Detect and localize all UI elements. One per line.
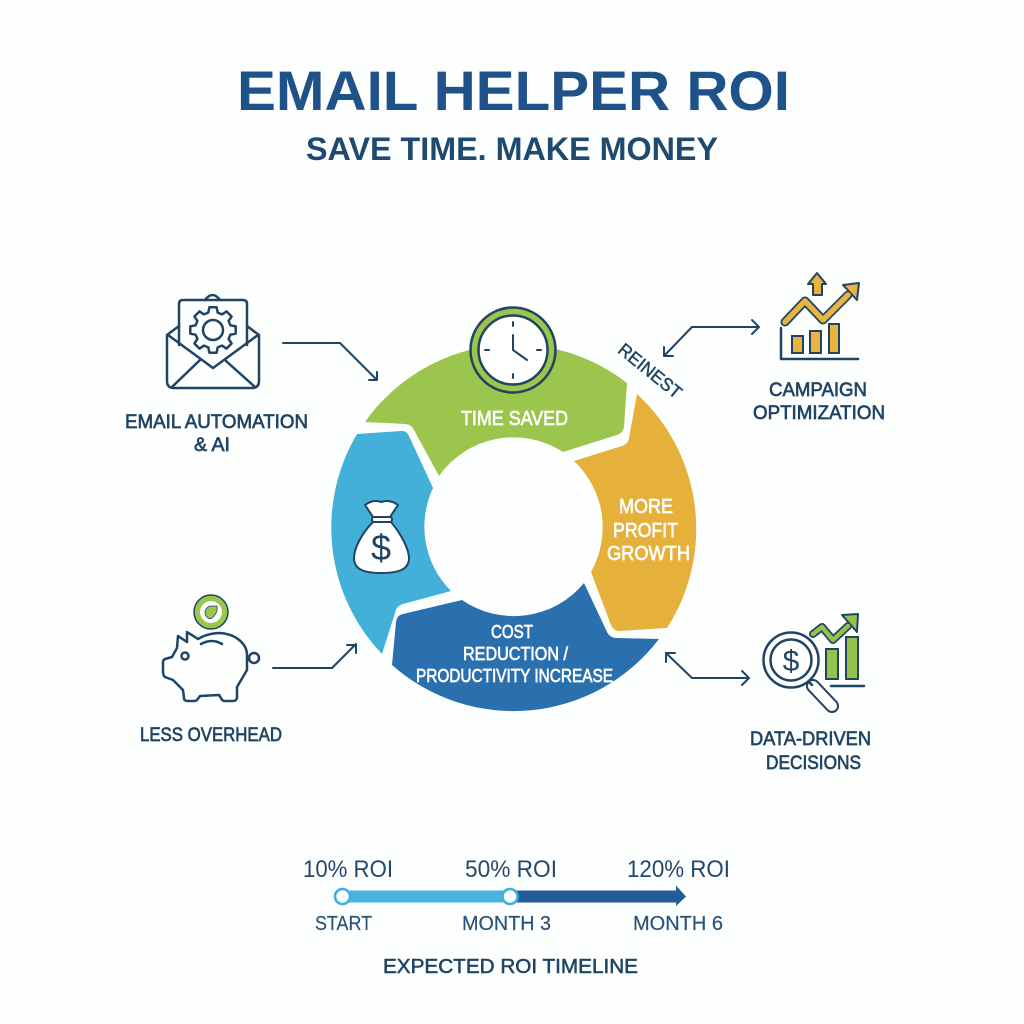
segment: cost reduction: PRODUCTIVITY INCREASE <box>416 666 613 686</box>
segment: more profit growth <box>574 394 696 631</box>
timeline months: MONTH 3 <box>462 913 551 935</box>
icon: coin <box>194 595 228 629</box>
segment: time saved: TIME SAVED <box>461 408 568 430</box>
label: reinest: REINEST <box>614 339 686 403</box>
label: optimization: OPTIMIZATION <box>753 403 885 424</box>
icon: envelope with gear <box>167 295 259 388</box>
timeline months: MONTH 6 <box>633 913 723 935</box>
timeline values: 120% ROI <box>627 856 730 883</box>
label: data-driven: DATA-DRIVEN <box>750 729 871 750</box>
group: data-driven decisions <box>750 614 871 774</box>
segment: more profit growth: PROFIT <box>613 520 678 542</box>
icon: piggy bank <box>163 632 259 701</box>
label: less overhead: LESS OVERHEAD <box>140 725 282 746</box>
segment: more profit growth: GROWTH <box>607 543 690 565</box>
timeline months <box>315 913 723 935</box>
timeline months: START <box>315 913 372 935</box>
icon: magnifier with chart <box>764 614 864 706</box>
label: campaign: CAMPAIGN <box>769 380 867 401</box>
group: email automation <box>125 295 308 456</box>
segment: money <box>331 431 451 654</box>
icon: magnifier with chart: $ <box>783 645 800 678</box>
timeline caption: EXPECTED ROI TIMELINE <box>383 956 638 978</box>
arrow: reinvest to campaign <box>664 320 759 356</box>
segment: cost reduction: COST <box>491 622 533 642</box>
arrow: overhead to cost <box>273 644 356 668</box>
label: email automation: EMAIL AUTOMATION <box>125 412 308 433</box>
segment: cost reduction <box>392 583 659 711</box>
segment: more profit growth: MORE <box>619 496 673 518</box>
icon: money bag: $ <box>371 527 391 568</box>
ROI timeline <box>303 856 730 978</box>
cycle diagram <box>331 308 696 711</box>
group: less overhead <box>140 595 282 746</box>
arrow: email to time saved <box>283 343 377 380</box>
title: EMAIL HELPER ROI <box>237 59 790 122</box>
icon: money bag <box>354 501 409 573</box>
label: and AI: & AI <box>194 435 230 456</box>
timeline values: 10% ROI <box>303 856 393 883</box>
subtitle: SAVE TIME. MAKE MONEY <box>306 131 718 167</box>
label: decisions: DECISIONS <box>766 753 861 774</box>
timeline values: 50% ROI <box>465 856 557 883</box>
icon: growth chart <box>781 273 859 359</box>
icon: clock <box>470 308 556 392</box>
group: campaign optimization <box>753 273 885 424</box>
segment: cost reduction: REDUCTION / <box>463 644 568 664</box>
timeline bar <box>335 886 686 906</box>
segment: time saved <box>365 344 627 476</box>
timeline values <box>303 856 730 883</box>
arrow: cost to data <box>666 653 749 685</box>
